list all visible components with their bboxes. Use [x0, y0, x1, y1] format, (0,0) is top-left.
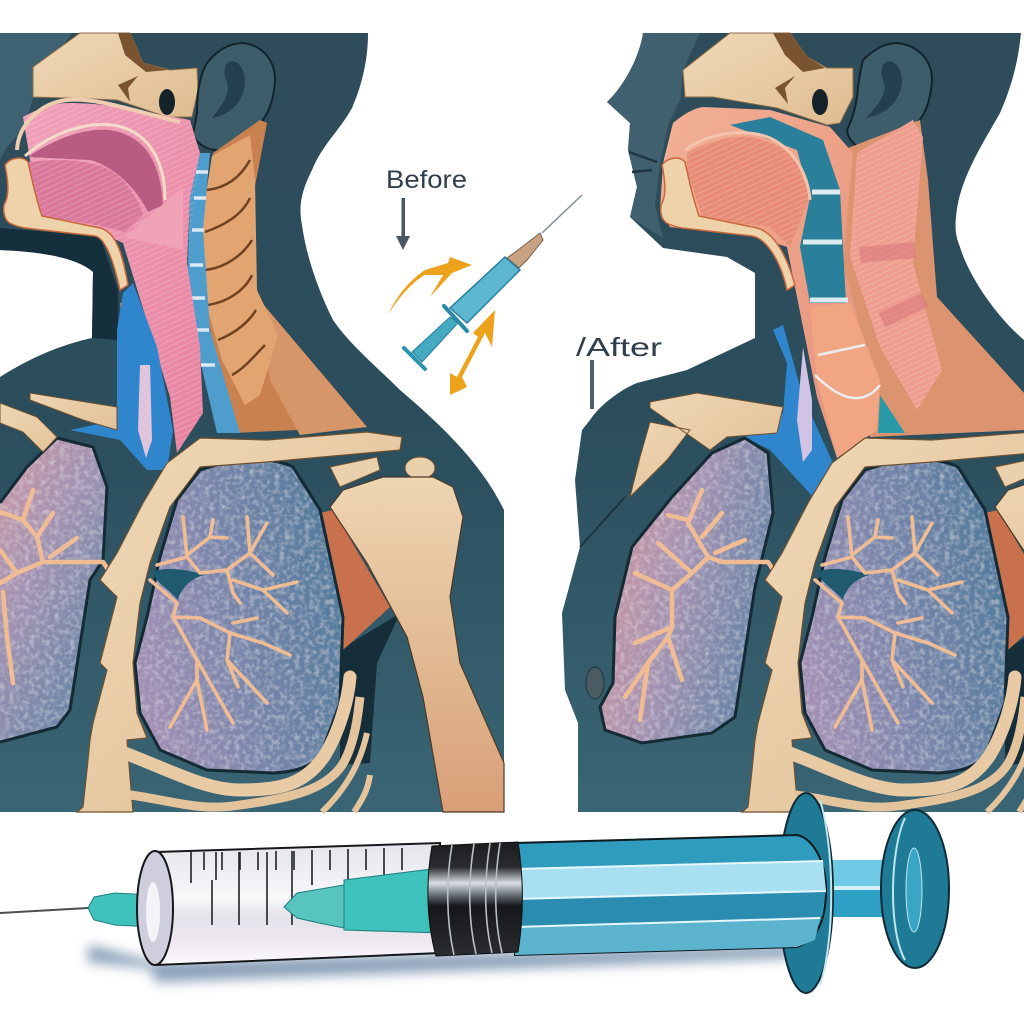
left bronchi after	[625, 490, 778, 720]
blue barrel	[515, 835, 826, 955]
throat muscle salmon	[660, 107, 878, 458]
ribs	[122, 677, 350, 790]
needle	[542, 195, 582, 233]
vertebrae	[203, 135, 278, 405]
vertebrae joints	[205, 160, 265, 375]
face shading	[0, 33, 72, 160]
dark hollow	[340, 613, 400, 765]
neck muscle bands	[860, 250, 925, 320]
lips bone	[4, 158, 128, 290]
throat brown tissue	[120, 300, 140, 400]
cap ellipse	[137, 851, 173, 965]
tongue	[687, 137, 810, 247]
plunger rod	[825, 860, 920, 888]
right lung	[135, 459, 343, 773]
jaw lips bone	[661, 158, 795, 290]
torso after	[742, 432, 1024, 812]
neck muscle fibers	[257, 297, 367, 435]
vessel highlight	[138, 365, 152, 458]
teal wedge	[878, 395, 905, 433]
middle flange	[444, 306, 467, 331]
striped neck muscle	[850, 120, 942, 410]
graduation marks	[191, 848, 402, 925]
light band	[515, 861, 826, 899]
blue vessels	[70, 283, 173, 470]
navel	[586, 667, 604, 699]
vessel highlight	[797, 347, 812, 462]
upper palate band	[17, 100, 180, 150]
right bronchi	[150, 517, 297, 730]
needle	[0, 908, 88, 913]
nostril	[812, 89, 828, 115]
rod	[412, 317, 458, 362]
label: before: Before	[386, 166, 467, 194]
small bones left	[0, 393, 117, 452]
arrows: orange swap	[388, 257, 495, 395]
label: after	[576, 332, 662, 409]
nostril	[159, 89, 175, 115]
blue vessels	[737, 325, 833, 497]
lower throat segment	[810, 303, 880, 458]
lips crease	[629, 152, 657, 172]
neck back muscle	[203, 120, 367, 433]
left lung after	[600, 438, 773, 743]
arrow: double lower	[450, 310, 495, 395]
humerus	[330, 477, 504, 812]
torso: right lung, bones and shoulder	[77, 432, 504, 812]
lower band	[515, 891, 826, 927]
panel: before anatomy	[0, 33, 504, 812]
arrow: curved upper	[388, 257, 472, 315]
bottom band	[515, 918, 820, 955]
teal cavity	[730, 117, 846, 303]
chest muscle	[320, 510, 390, 650]
tongue lower lobe	[28, 160, 143, 232]
body silhouette before	[0, 33, 504, 812]
tongue dome	[28, 130, 163, 212]
hub	[507, 233, 543, 268]
neck triangle muscle	[125, 187, 183, 250]
chin shadow	[0, 228, 118, 340]
left lung after outline	[600, 438, 773, 743]
barrel	[450, 257, 520, 323]
inner hub	[284, 885, 344, 928]
end flange	[881, 810, 949, 968]
body silhouette after	[562, 33, 1024, 812]
stopper black band	[428, 842, 522, 956]
collar small bones	[330, 457, 380, 487]
spine blue strip	[187, 153, 240, 433]
sinus cavity	[118, 33, 168, 102]
drop shadow	[88, 945, 790, 982]
skull bone	[683, 33, 853, 125]
outer neck muscle	[843, 120, 1024, 437]
barrel flange	[779, 793, 833, 993]
needle hub	[88, 893, 150, 927]
band lines	[515, 861, 826, 927]
belly crease	[580, 497, 625, 547]
clear barrel	[138, 843, 440, 965]
label: before	[386, 166, 467, 250]
sinus cavity	[773, 33, 825, 104]
right lung outline	[135, 459, 343, 773]
marker: after pointer	[590, 360, 594, 409]
small bones after	[630, 393, 783, 497]
face shading	[607, 33, 700, 238]
label: after: /After	[576, 332, 662, 362]
icon: large syringe	[0, 793, 949, 993]
left lung	[0, 438, 107, 742]
ear	[193, 43, 275, 150]
end flange	[404, 348, 425, 369]
sternum and clavicle	[77, 432, 402, 812]
throat muscle pink	[23, 103, 203, 453]
arrow: before pointer	[396, 198, 410, 250]
panel: after anatomy	[562, 33, 1024, 812]
skull bone	[33, 33, 198, 117]
inner barrel	[344, 868, 440, 933]
ear	[847, 43, 932, 152]
left lung outline	[0, 438, 107, 742]
icon: small syringe	[404, 195, 582, 369]
left bronchi	[0, 490, 113, 683]
lung notch	[152, 569, 205, 600]
